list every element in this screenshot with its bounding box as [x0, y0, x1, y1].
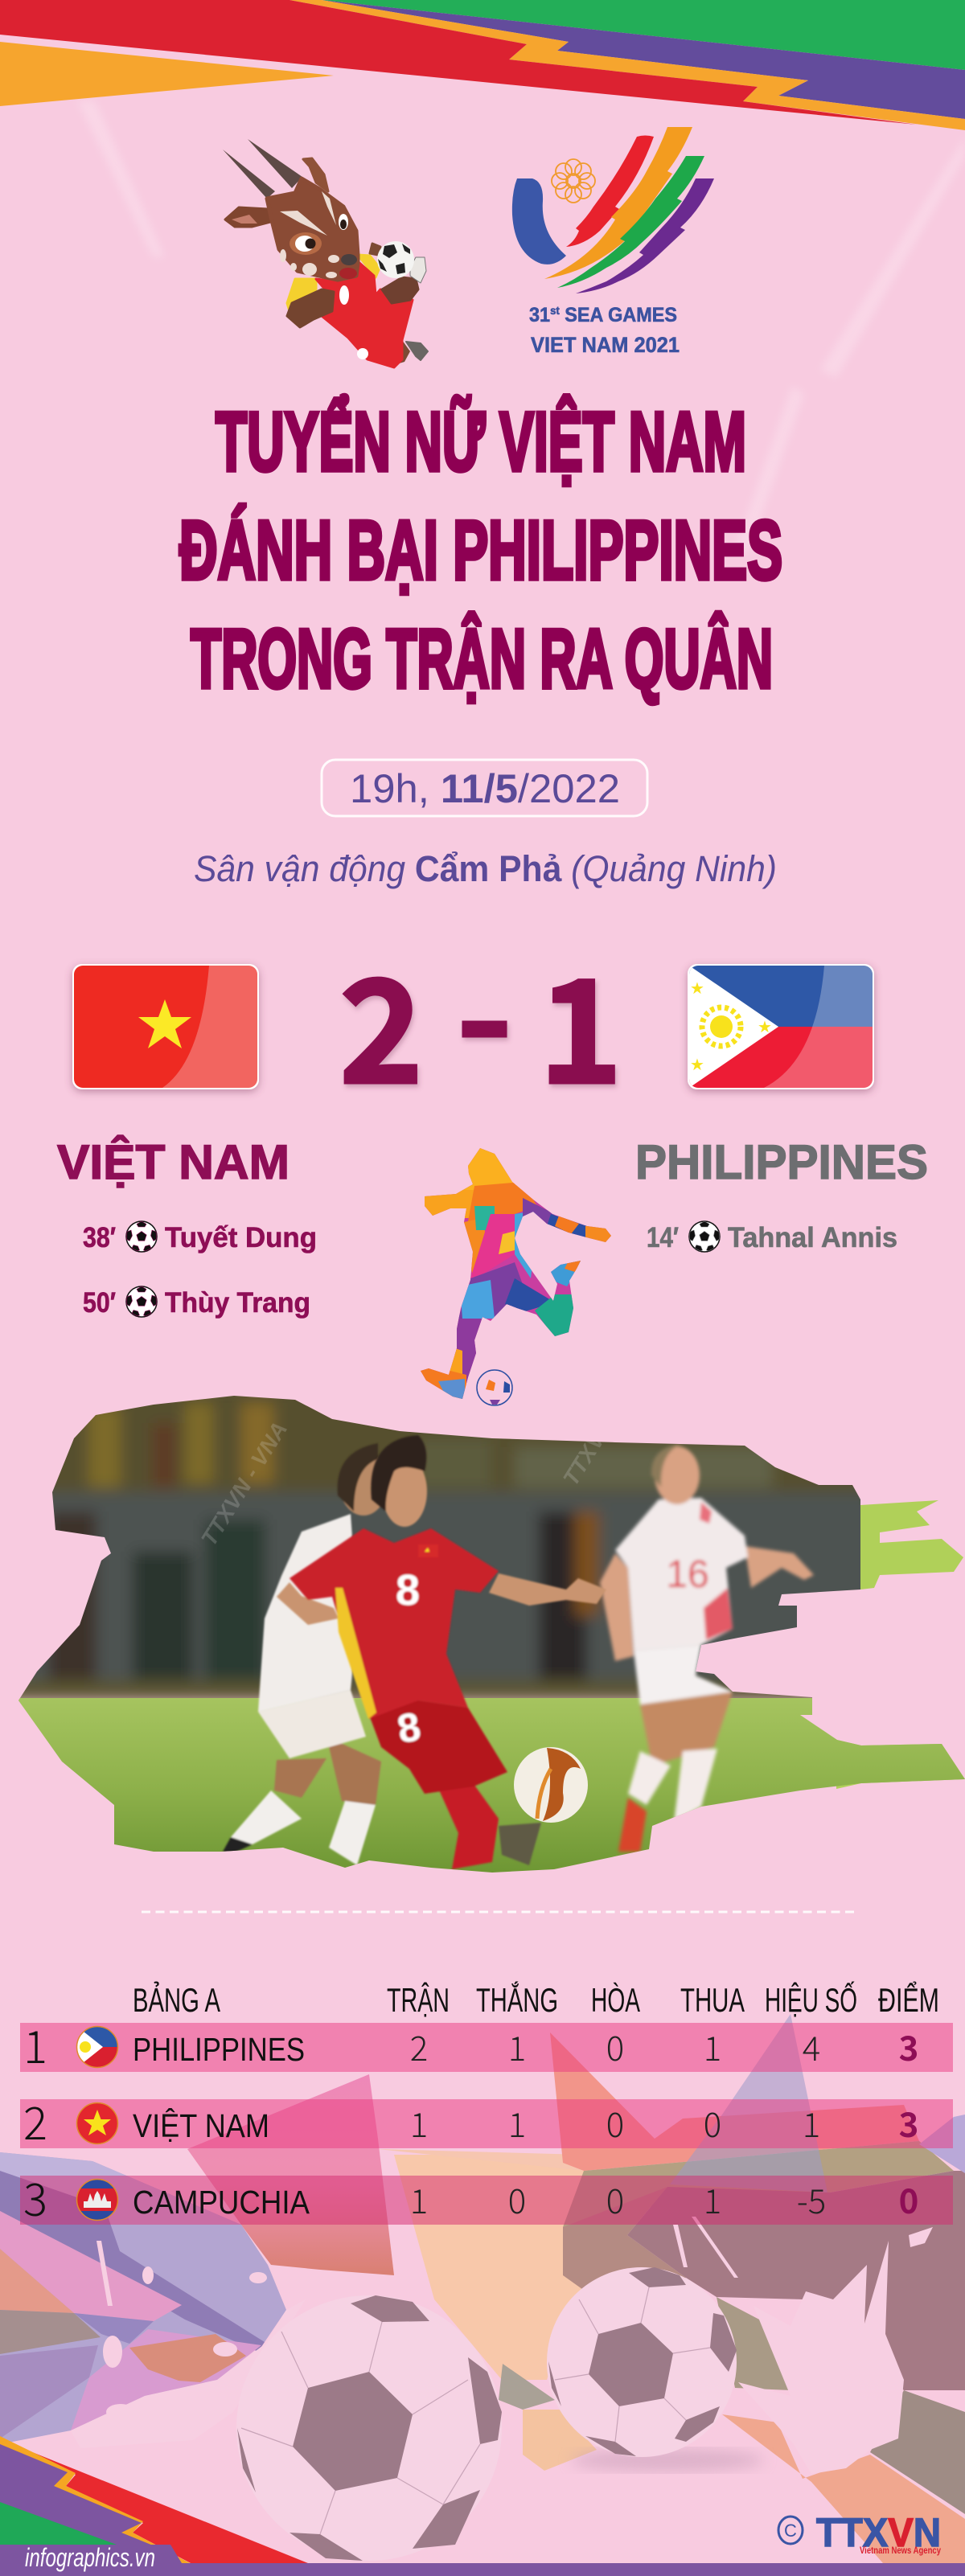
- mascot: deer kicking a ball: [223, 139, 428, 367]
- player: Philippines defender: [223, 1443, 388, 1865]
- photo background: stands, wall and pitch: [18, 1396, 860, 1706]
- flag: Vietnam: [72, 964, 259, 1089]
- row 2: Việt Nam: 1: [803, 2098, 820, 2147]
- SEA Games caption: st: [550, 304, 560, 317]
- scorer: Tuyết Dung: [83, 1221, 317, 1253]
- logo: TTXVN: TTXVN: [816, 2510, 941, 2555]
- row 2: Việt Nam: 1: [508, 2098, 526, 2147]
- row 1: Philippines: [20, 2023, 953, 2072]
- table header: THUA: [680, 1981, 745, 2019]
- SEA Games caption: [529, 304, 680, 357]
- venue: Sân vận động Cẩm Phả (Quảng Ninh): [194, 848, 777, 889]
- art: left colour shards: [0, 2152, 306, 2448]
- row 1: Philippines: 4: [803, 2022, 820, 2071]
- logo: TTXVN: C: [784, 2521, 797, 2541]
- scorer: Thùy Trang: [83, 1286, 310, 1319]
- row 3: Campuchia: 0: [899, 2175, 918, 2224]
- art: centre colour shards: [187, 2032, 954, 2471]
- scorer: Tuyết Dung: Tuyết Dung: [165, 1222, 317, 1253]
- scorer: Thùy Trang: 50′: [83, 1287, 116, 1319]
- table header: TRẬN: [387, 1981, 450, 2019]
- table header: HÒA: [591, 1981, 640, 2019]
- SEA Games caption: VIET NAM 2021: [531, 333, 680, 357]
- row 1: Philippines: 1: [704, 2022, 721, 2071]
- row 1: Philippines: 2: [410, 2022, 428, 2071]
- row 1: Philippines: 1: [508, 2022, 526, 2071]
- row 2: Việt Nam: [20, 2099, 953, 2148]
- top colour banner: [0, 0, 965, 130]
- date box: [322, 760, 647, 816]
- flag: Philippines: ★: [758, 1019, 772, 1036]
- bottom colour banner: [0, 2436, 965, 2576]
- player: Vietnam number 8: [277, 1435, 606, 1869]
- row 3: Campuchia: 1: [410, 2175, 428, 2224]
- dashed divider: [142, 1910, 856, 1914]
- row 2: Việt Nam: 3: [899, 2098, 918, 2147]
- art: right colour shards and paint splash: [627, 2014, 965, 2563]
- table header: ĐIỂM: [878, 1980, 939, 2019]
- score: 2: [339, 918, 424, 1125]
- art: small soccer ball: [547, 2267, 737, 2457]
- photo watermark: [201, 1423, 602, 1544]
- row 3: Campuchia: 3: [23, 2164, 47, 2229]
- photo watermark: TTXVN - VNA: [196, 1417, 292, 1550]
- table header: BẢNG A: [133, 1980, 220, 2019]
- scorer: Tahnal Annis: 14′: [647, 1222, 679, 1253]
- team: Việt Nam: VIỆT NAM: [57, 1135, 290, 1189]
- SEA Games caption: 31: [529, 304, 552, 326]
- bottom background art: [0, 2014, 965, 2563]
- player: Philippines number 16: [600, 1443, 814, 1852]
- row 3: Campuchia: -5: [797, 2175, 826, 2224]
- background light streaks: [77, 100, 965, 555]
- scorer: Tuyết Dung: 38′: [83, 1222, 116, 1253]
- scorer: Tahnal Annis: Tahnal Annis: [728, 1222, 897, 1253]
- art: small ball shadow: [571, 2449, 764, 2471]
- row 2: Việt Nam: 2: [23, 2088, 47, 2153]
- logo: TTXVN: Vietnam News Agency: [860, 2545, 941, 2556]
- table header: HIỆU SỐ: [765, 1980, 857, 2019]
- standings table: [20, 1980, 953, 2229]
- match ball: [514, 1747, 588, 1823]
- row 3: Campuchia: [20, 2176, 953, 2225]
- match photo: [0, 1383, 965, 1883]
- row 1: Philippines: 1: [23, 2012, 47, 2077]
- row 1: Philippines: PHILIPPINES: [133, 2031, 305, 2068]
- row 2: Việt Nam: 1: [410, 2098, 428, 2147]
- score: [339, 918, 623, 1125]
- table header: THẮNG: [476, 1980, 558, 2019]
- flag: Philippines: [688, 964, 874, 1089]
- player: Philippines number 16: 16: [666, 1553, 709, 1596]
- SEA Games logo: [512, 127, 714, 293]
- row 1: Philippines: 3: [899, 2022, 918, 2071]
- photo watermark: TTXVN: [558, 1413, 618, 1490]
- icon: colourful player silhouette: [421, 1148, 611, 1406]
- row 2: Việt Nam: 0: [606, 2098, 624, 2147]
- player: Vietnam number 8: 8: [394, 1704, 424, 1752]
- team: Philippines: PHILIPPINES: [635, 1135, 928, 1189]
- row 1: Philippines: 0: [606, 2022, 624, 2071]
- row 2: Việt Nam: VIỆT NAM: [133, 2107, 269, 2144]
- title: [179, 395, 782, 706]
- row 3: Campuchia: 0: [606, 2175, 624, 2224]
- row 2: Việt Nam: 0: [704, 2098, 721, 2147]
- row 3: Campuchia: CAMPUCHIA: [133, 2184, 310, 2221]
- scorer: Thùy Trang: Thùy Trang: [165, 1287, 310, 1319]
- row 3: Campuchia: 0: [508, 2175, 526, 2224]
- green brush shapes beside photo: [836, 1500, 965, 1789]
- flag: Philippines: ★: [690, 1056, 704, 1074]
- player: Vietnam number 8: 8: [396, 1566, 420, 1614]
- scorer: Tahnal Annis: [647, 1221, 897, 1253]
- row 3: Campuchia: 1: [704, 2175, 721, 2224]
- SEA Games caption: SEA GAMES: [560, 304, 677, 326]
- score: 1: [538, 918, 623, 1125]
- source: infographics.vn: infographics.vn: [25, 2543, 155, 2572]
- flag: Philippines: ★: [690, 980, 704, 998]
- art: large soccer ball: [236, 2295, 502, 2561]
- date box: 19h, 11/5/2022: [350, 766, 620, 811]
- table header: [133, 1980, 939, 2019]
